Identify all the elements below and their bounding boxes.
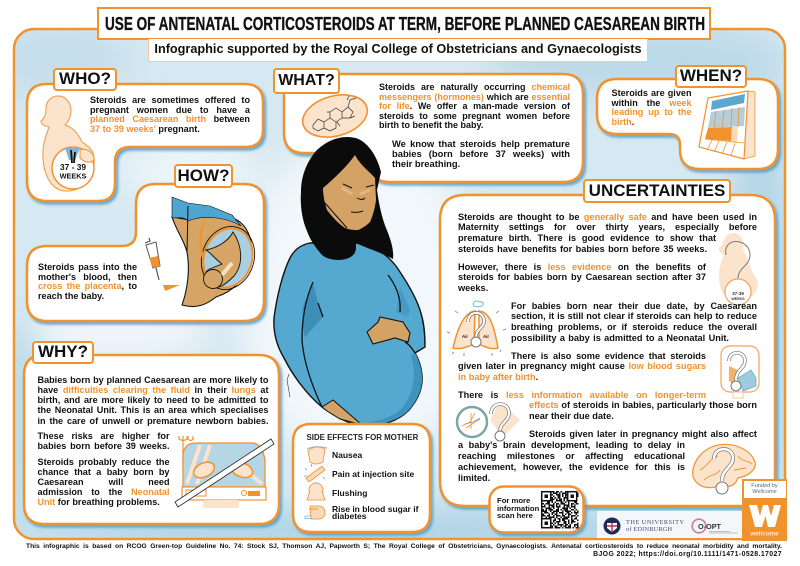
subtitle: [148, 39, 648, 62]
list: side effects: Nausea: [332, 450, 362, 460]
text: how: reach the baby.: [38, 291, 104, 301]
icon: syringe: [145, 238, 160, 280]
text: longer-term effects: There is less information available on longer-term: [458, 390, 706, 400]
panel: why: [22, 341, 284, 530]
text: when: Steroids are given: [612, 88, 692, 98]
text: why benefit: admission to the Neonatal: [38, 487, 170, 497]
text: how: Steroids pass into the: [38, 262, 137, 272]
text: who: planned Caesarean birth between: [90, 114, 250, 124]
text: brain development: a baby's brain development, leading to delay in: [458, 440, 685, 450]
heading: who: [53, 68, 117, 91]
text: why benefit: Unit for breathing problems.: [38, 497, 160, 507]
text: what steroids are: birth to benefit the baby.: [379, 120, 483, 130]
logo: university of edinburgh: THE UNIVERSITY: [626, 519, 684, 526]
text: funded by: [744, 480, 786, 498]
logo: co-opt: [692, 519, 706, 533]
text: what steroids are: Steroids are naturally occurring chemical: [379, 82, 570, 92]
text: why benefit: [38, 457, 170, 507]
title: [97, 7, 711, 40]
text: brain development: reaching milestones or affecting educational: [458, 451, 685, 461]
text: low blood sugars: There is also some evidence that steroids: [511, 350, 706, 360]
heading: how: HOW?: [178, 166, 229, 185]
logo: university of edinburgh: of EDINBURGH: [626, 526, 672, 533]
footer: citation: BJOG 2022; https://doi.org/10.1111/1471-0528.17027: [593, 551, 782, 558]
text: who: pregnant women due to have a: [90, 104, 250, 114]
text: when: birth.: [612, 117, 634, 127]
list: side effects: Rise in blood sugar if: [332, 504, 418, 514]
list: side effects: Flushing: [332, 488, 367, 498]
text: generally safe: Steroids are thought to be generally safe and have been used in: [458, 212, 757, 222]
text: how: mother's blood, then: [38, 272, 137, 282]
text: brain development: achievement, however, the evidence for this is: [458, 462, 685, 472]
text: what steroids are: messengers (hormones) which are essential: [379, 92, 570, 102]
panel: when: [596, 65, 783, 174]
icon: nausea: [307, 447, 327, 464]
text: funded by: Wellcome: [752, 489, 777, 495]
text: qr prompt: For more: [497, 496, 530, 505]
text: generally safe: [458, 212, 757, 254]
text: less evidence: [458, 262, 706, 293]
panel: logos: [597, 511, 743, 538]
list: side effects: diabetes: [332, 511, 366, 521]
footer: citation: [26, 543, 782, 558]
icon: pregnant silhouette with clock: 37 - 39: [60, 162, 86, 172]
icon: uterus and baby cross-section: [172, 197, 263, 307]
text: brain development: Steroids given later in pregnancy might also affect: [529, 429, 757, 439]
panel: side effects for mother: [292, 422, 435, 538]
list: side effects: [332, 450, 418, 521]
text: brain development: [458, 429, 757, 483]
text: longer-term effects: [458, 390, 757, 421]
icon: clock with question mark: [457, 402, 520, 441]
footer: citation: This infographic is based on RCOG Green-top Guideline No. 74: Stock SJ, Thomson AJ, Papworth S; The Royal College of Obstetricians, Gynaecologists. Antenatal corticosteroids to reduce neonatal morbidity and mortality.: [26, 543, 782, 550]
heading: what: [273, 68, 340, 94]
heading: uncertainties: UNCERTAINTIES: [589, 181, 725, 200]
icon: flushing: [307, 483, 325, 500]
logo: wellcome w: wellcome: [749, 530, 779, 538]
text: when: leading up to the: [612, 107, 692, 117]
heading: side effects: SIDE EFFECTS FOR MOTHER: [306, 432, 418, 442]
text: qr prompt: [497, 496, 539, 520]
heading: why: WHY?: [38, 342, 88, 361]
woman: face: [323, 155, 376, 230]
text: near due date: For babies born near their due date, by Caesarean: [511, 300, 757, 310]
text: when: [612, 88, 692, 127]
text: who: 37 to 39 weeks' pregnant.: [90, 124, 200, 134]
panel: how: [26, 164, 269, 326]
arrow: into blood: [163, 285, 180, 291]
text: what premature: [392, 138, 570, 169]
text: why risks: These risks are higher for: [38, 431, 170, 441]
illustration: pregnant woman: [273, 137, 426, 423]
text: funded by: Funded by: [751, 482, 778, 488]
text: who: Steroids are sometimes offered to: [90, 95, 250, 105]
text: low blood sugars: [458, 350, 706, 382]
icon: lungs with question mark: [447, 301, 506, 356]
icon: pregnant silhouette with clock: WEEKS: [60, 172, 87, 180]
woman: lower hand: [322, 400, 362, 425]
text: generally safe: premature birth. There is good evidence to show that: [458, 233, 716, 243]
text: what steroids are: steroids to some pregnant women before: [379, 111, 570, 121]
text: who: [90, 95, 250, 134]
panel: qr code: [488, 485, 588, 538]
text: longer-term effects: near their due date.: [529, 411, 614, 421]
text: why benefit: Caesarean will need: [38, 477, 170, 487]
text: what premature: babies (born before 37 weeks) with: [392, 148, 570, 159]
icon: brain with question mark: [693, 444, 755, 494]
panel: who: [26, 68, 268, 206]
text: why intro: in the care of unwell or premature newborn babies.: [38, 416, 268, 426]
icon: calendar: [699, 91, 755, 159]
text: why intro: [38, 375, 268, 426]
text: less evidence: weeks.: [458, 283, 488, 293]
qr code: [541, 492, 578, 528]
text: less evidence: steroids for babies born by Caesarean section after 37: [458, 272, 706, 282]
icon: incubator crossed out: [175, 436, 274, 508]
text: generally safe: Maternity settings for over thirty years, especially before: [458, 222, 757, 232]
text: when: within the week: [612, 98, 692, 108]
text: why intro: Babies born by planned Caesarean are more likely to: [38, 375, 268, 385]
icon: pain at injection site: [304, 464, 325, 484]
heading: what: WHAT?: [278, 72, 335, 89]
panel: uncertainties: [438, 179, 780, 512]
woman: upper hand: [367, 317, 410, 344]
heading: when: WHEN?: [680, 66, 742, 85]
text: less evidence: However, there is less evidence on the benefits of: [458, 262, 706, 272]
text: why intro: birth, and are more likely to need to be admitted to: [38, 395, 268, 405]
text: why benefit: chance that a baby born by: [38, 467, 170, 477]
text: generally safe: steroids have benefits for babies born before 35 weeks.: [458, 244, 707, 254]
text: what premature: their breathing.: [392, 158, 460, 169]
text: near due date: breathing problems, or if steroids reduce the overall: [511, 322, 757, 332]
panel: what: [273, 68, 588, 188]
text: brain development: limited.: [458, 473, 490, 483]
text: what steroids are: [379, 82, 570, 130]
icon: lungs with question mark: Air: [462, 334, 468, 339]
text: qr prompt: scan here: [497, 511, 533, 520]
icon: pregnant woman with question mark: 37-39: [732, 291, 744, 296]
icon: pregnant woman with question mark: WEEKS: [731, 297, 745, 301]
text: what premature: We know that steroids help premature: [392, 138, 570, 149]
icon: lungs with question mark: Air: [483, 334, 489, 339]
text: why intro: have difficulties clearing the fluid in their lungs at: [38, 385, 268, 395]
text: near due date: [511, 300, 757, 343]
list: side effects: Pain at injection site: [332, 469, 414, 479]
text: near due date: possibility a baby is admitted to a Neonatal Unit.: [511, 333, 729, 343]
text: how: cross the placenta, to: [38, 281, 137, 291]
text: low blood sugars: given later in pregnancy might cause low blood sugars: [458, 361, 706, 371]
text: why benefit: Steroids probably reduce the: [38, 457, 170, 467]
icon: pregnant woman with question mark: [719, 233, 758, 305]
text: qr prompt: information: [497, 504, 539, 512]
panel: funded by wellcome: [742, 479, 787, 541]
heading: why: [32, 341, 94, 364]
text: how: [38, 262, 137, 301]
woman: dress: [274, 243, 425, 426]
text: longer-term effects: effects of steroids in babies, particularly those born: [529, 400, 757, 410]
logo: university of edinburgh: O-OPT: [698, 522, 721, 531]
icon: blood sugar monitor with question mark: [721, 346, 759, 398]
subtitle: Infographic supported by the Royal College of Obstetricians and Gynaecologists: [154, 42, 642, 56]
text: why risks: babies born before 39 weeks.: [38, 441, 170, 451]
heading: who: WHO?: [59, 69, 111, 88]
icon: blood sugar finger prick: [305, 506, 325, 519]
text: why intro: the Neonatal Unit. This is an area which specialises: [38, 405, 268, 415]
icon: steroid molecule: [298, 88, 372, 144]
woman: hair: [301, 137, 393, 260]
icon: pregnant silhouette with clock: [41, 96, 94, 191]
text: what steroids are: for life. We offer a man-made version of: [379, 101, 570, 111]
text: near due date: section, it is still not clear if steroids can help to reduce: [511, 311, 757, 321]
text: low blood sugars: in baby after birth.: [458, 372, 538, 382]
text: why risks: [38, 431, 170, 451]
heading: how: [174, 164, 233, 188]
